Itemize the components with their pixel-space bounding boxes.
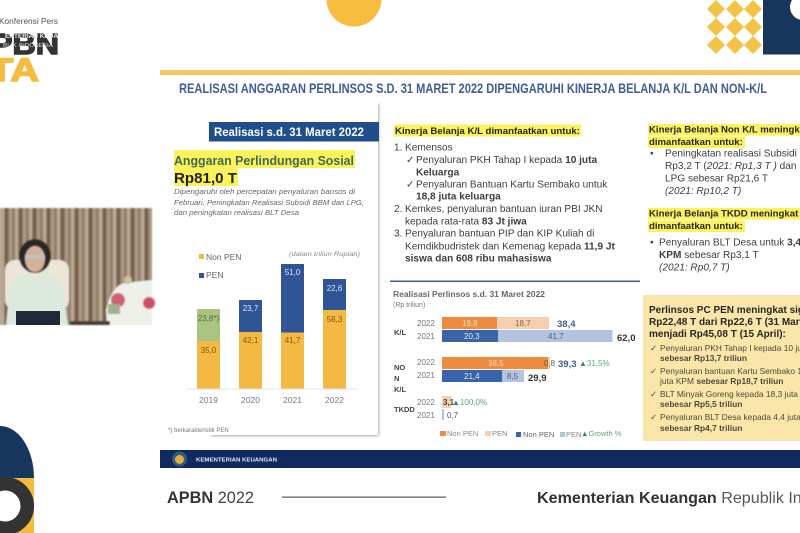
chart legend: Non PEN [206,252,241,262]
chart legend [199,252,241,280]
text block: TKDD spending: • [650,238,654,248]
text block: TKDD spending [648,208,800,274]
group: Non K/L: 21,4 [464,372,480,381]
group: Non K/L: NO [394,363,405,372]
bar 2022 [323,279,346,405]
text block: K/L spending: Penyaluran Bantuan Kartu Sembako untuk [416,180,608,190]
group: Non K/L: 0,8 [544,359,556,368]
text block: K/L spending: Penyaluran bantuan PIP dan KIP Kuliah di [405,228,594,240]
bar chart legend: Non PEN [523,430,554,439]
budget heading: Anggaran Perlindungan Sosial [174,154,354,168]
callout: Perlinsos PC PEN: ✓ [650,389,657,399]
diamond pattern [707,0,762,54]
text block: K/L spending: Kinerja Belanja K/L dimanfaatkan untuk: [395,126,580,137]
bar 2020: 42,1 [243,336,259,345]
bar 2019: 2019 [199,395,218,405]
text block: TKDD spending: dimanfaatkan untuk: [649,221,743,232]
bar 2019: 23,8*) [198,314,220,323]
bar chart legend: PEN [492,429,507,438]
group: Non K/L: 2022 [417,358,435,367]
group: TKDD: 3,1 [443,398,455,407]
video feed of speaker [0,208,155,325]
text block: TKDD spending: Kinerja Belanja TKDD meningkat [649,208,799,220]
text block: K/L spending [394,124,616,264]
bar 2020 [239,300,262,405]
press conference logo: Konferensi Pers [0,16,58,26]
callout: Perlinsos PC PEN: menjadi Rp45,08 T (15 April): [649,329,786,340]
panel header [209,122,379,142]
bottom-left decorative shapes [0,426,34,533]
text block: K/L spending: Kemdikbudristek dan Kemenag kepada 11,9 Jt [405,242,616,252]
text block: K/L spending: 18,8 juta keluarga [416,192,501,202]
bar chart legend [440,429,622,439]
text block: K/L spending: Kemkes, penyaluran bantuan iuran PBI JKN [405,204,603,215]
text block: K/L spending: Keluarga [416,168,460,178]
bar 2020: 23,7 [243,304,259,313]
text block: Non K/L spending: (2021: Rp10,2 T) [665,186,741,197]
group: TKDD: TKDD [394,405,415,414]
text block: K/L spending: Penyaluran PKH Tahap I kepada 10 juta [416,155,597,166]
group: Non K/L [394,357,610,394]
group: Non K/L: 2021 [417,371,435,380]
budget heading [174,150,355,187]
text block: K/L spending: kepada rata-rata 83 Jt jiwa [405,216,527,228]
group: K/L: 19,8 [462,319,478,328]
bar 2021: 51,0 [285,268,301,277]
group: TKDD: 0,7 [447,411,459,420]
group: K/L: 20,3 [464,332,480,341]
group: Non K/L: 29,9 [528,373,546,384]
text block: K/L spending: ✓ [406,180,414,190]
text block: TKDD spending: KPM sebesar Rp3,1 T [659,250,759,261]
group: K/L: 62,0 [617,333,636,344]
callout: Perlinsos PC PEN: juta KPM sebesar Rp18,7 triliun [659,376,783,386]
text block: Non K/L spending: dimanfaatkan untuk: [649,137,743,148]
bar chart legend: PEN [566,430,581,439]
callout: Perlinsos PC PEN: sebesar Rp13,7 triliun [660,353,747,363]
bar chart legend: Non PEN [447,429,478,438]
group: Non K/L: K/L [394,385,406,394]
text block: Non K/L spending: LPG sebesar Rp21,6 T [665,174,768,184]
bar 2022: 22,6 [327,284,343,293]
horizontal bar chart [390,280,640,439]
slide top rule [160,70,800,75]
press conference logo: BLIK INDONESIA [3,43,54,49]
group: TKDD: ▲100,0% [452,398,487,407]
footer: APBN 2022: APBN 2022 [167,488,254,507]
callout: Perlinsos PC PEN: ✓ [650,366,657,376]
group: K/L: 2022 [417,319,435,328]
bar 2019: 35,0 [201,346,217,355]
footer rule [282,496,446,498]
group: K/L [394,317,636,344]
group: Non K/L: ▲31,5% [579,359,610,368]
text block: K/L spending: 3. [394,228,402,240]
group: K/L: 41,7 [548,332,564,341]
callout: Perlinsos PC PEN: sebesar Rp4,7 triliun [660,423,742,433]
group: Non K/L: 8,5 [507,372,519,381]
text block: K/L spending: 2. [394,204,402,215]
bar chart legend: ▲Growth % [581,429,622,438]
budget description [174,187,364,217]
text block: K/L spending: siswa dan 608 ribu mahasiswa [405,254,552,264]
group: Non K/L: N [394,374,399,383]
callout: Perlinsos PC PEN: ✓ [650,343,657,353]
footnote: *) berkarakteristik PEN [168,428,229,434]
chart legend: PEN [206,270,223,280]
press conference logo: ENTERIAN KEUA [5,34,59,40]
callout: Perlinsos PC PEN [643,295,800,441]
bar 2022: 58,3 [327,315,343,324]
text block: Non K/L spending: • [650,148,654,160]
panel: social protection budget [160,102,379,436]
bar 2019 [197,309,220,405]
slide footer bar: KEMENTERIAN KEUANGAN [196,458,277,464]
chart unit note: (dalam triliun Rupiah) [289,251,360,258]
bar 2021: 2021 [283,395,302,405]
group: K/L: 38,4 [557,319,576,330]
group: TKDD: 2022 [417,398,435,407]
icon: ministry emblem [172,452,187,466]
decorative yellow circle [326,0,382,26]
text block: Non K/L spending [648,124,800,197]
press conference logo [0,16,59,88]
budget description: Februari, Peningkatan Realisasi Subsidi BBM dan LPG, [174,198,364,207]
horizontal bar chart: (Rp triliun) [393,302,425,309]
bar 2022: 2022 [325,395,344,405]
text block: K/L spending: Kemensos [405,142,453,154]
text block: K/L spending: 1. [394,142,402,154]
budget heading: Rp81,0 T [174,170,237,187]
bar 2021: 41,7 [285,336,301,345]
stacked bar chart [187,251,360,405]
text block: K/L spending: ✓ [406,155,414,166]
text block: TKDD spending: (2021: Rp0,7 T) [659,262,730,274]
group: K/L: K/L [394,328,406,337]
group: K/L: 2021 [417,332,435,341]
chart title: Realisasi Perlinsos s.d. 31 Maret 2022 [393,289,545,299]
navy corner shape [763,0,800,54]
group: Non K/L: 38,5 [488,359,504,368]
group: Non K/L: 39,3 [558,359,576,370]
bar 2020: 2020 [241,395,260,405]
slide footer bar [160,450,800,468]
group: TKDD: 2021 [417,411,435,420]
budget description: Dipengaruhi oleh percepatan penyaluran bansos di [174,187,355,196]
callout: Perlinsos PC PEN: sebesar Rp5,5 triliun [660,399,742,409]
group: TKDD [394,396,487,420]
budget description: dan peningkatan realisasi BLT Desa [174,208,299,217]
callout: Perlinsos PC PEN: ✓ [650,412,657,422]
bar 2021 [281,264,304,405]
group: K/L: 18,7 [515,319,531,328]
panel header: Realisasi s.d. 31 Maret 2022 [214,127,364,139]
